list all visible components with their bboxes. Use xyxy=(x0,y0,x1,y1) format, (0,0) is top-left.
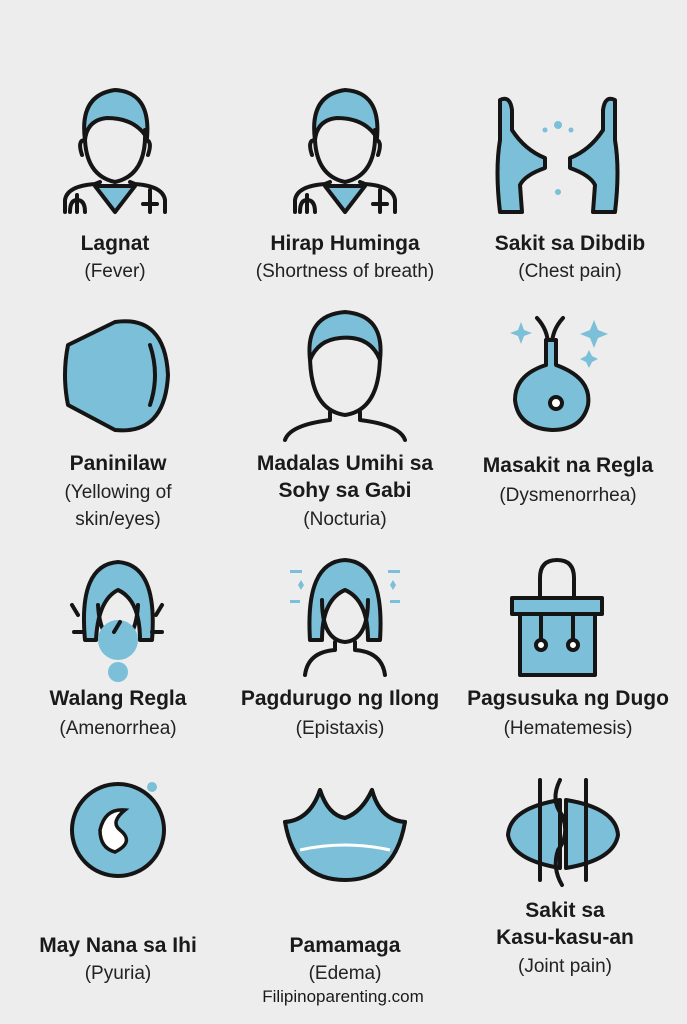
label: Sakit sa Kasu-kasu-an xyxy=(496,899,634,977)
icon: two figures xyxy=(498,99,618,212)
label: Lagnat xyxy=(81,232,149,282)
label: Pagdurugo ng Ilong xyxy=(241,687,439,739)
label: Walang Regla: (Amenorrhea) xyxy=(59,718,177,739)
label: May Nana sa Ihi: May Nana sa Ihi xyxy=(39,934,197,957)
icon: flask xyxy=(510,318,608,430)
label: Paninilaw: (Yellowing of xyxy=(64,482,172,503)
icon: doctor 2 xyxy=(295,90,395,212)
label: Pagsusuka ng Dugo xyxy=(467,687,669,739)
icon: woman xyxy=(290,560,400,675)
label: Hirap Huminga: Hirap Huminga xyxy=(270,232,420,255)
label: Pamamaga: (Edema) xyxy=(309,963,381,984)
label: Pagdurugo ng Ilong: Pagdurugo ng Ilong xyxy=(241,687,439,710)
label: Sakit sa Kasu-kasu-an: Kasu-kasu-an xyxy=(496,926,634,949)
label: Lagnat: (Fever) xyxy=(84,261,146,282)
label: May Nana sa Ihi: (Pyuria) xyxy=(85,963,151,984)
icon: cone/ear xyxy=(65,321,168,430)
icon: joint xyxy=(508,780,618,885)
label: Hirap Huminga: (Shortness of breath) xyxy=(256,261,434,282)
label: Masakit na Regla: (Dysmenorrhea) xyxy=(499,485,637,506)
label: Walang Regla xyxy=(50,687,187,739)
label: Pamamaga: Pamamaga xyxy=(290,934,401,957)
label: Hirap Huminga xyxy=(256,232,434,282)
label: Madalas Umihi: Madalas Umihi sa xyxy=(257,452,433,475)
label: Pagdurugo ng Ilong: (Epistaxis) xyxy=(296,718,384,739)
label: Madalas Umihi xyxy=(257,452,433,530)
label: Pagsusuka ng Dugo: Pagsusuka ng Dugo xyxy=(467,687,669,710)
label: Madalas Umihi: (Nocturia) xyxy=(303,509,387,530)
label: Sakit sa Kasu-kasu-an: (Joint pain) xyxy=(518,956,612,977)
footer: Filipinoparenting.com xyxy=(262,987,424,1006)
icon: doctor 1 xyxy=(65,90,165,212)
label: Masakit na Regla: Masakit na Regla xyxy=(483,454,654,477)
icon: basket xyxy=(512,560,602,675)
label: Pagsusuka ng Dugo: (Hematemesis) xyxy=(504,718,632,739)
icon: circle with swirl xyxy=(72,782,164,876)
icon: water wave bowl xyxy=(285,790,405,880)
label: Masakit na Regla xyxy=(483,454,654,506)
label: Sakit sa Kasu-kasu-an: Sakit sa xyxy=(525,899,605,922)
label: Paninilaw xyxy=(64,452,172,530)
label: Sakit sa Dibdib: Sakit sa Dibdib xyxy=(495,232,645,255)
icon: person xyxy=(285,312,405,440)
label: May Nana sa Ihi xyxy=(39,934,197,984)
label: Sakit sa Dibdib xyxy=(495,232,645,282)
label: Sakit sa Dibdib: (Chest pain) xyxy=(518,261,622,282)
label: Paninilaw: skin/eyes) xyxy=(75,509,161,530)
icon: woman with mask xyxy=(72,562,162,682)
label: Madalas Umihi: Sohy sa Gabi xyxy=(278,479,412,502)
label: Pamamaga xyxy=(290,934,401,984)
label: Paninilaw: Paninilaw xyxy=(70,452,167,475)
label: Walang Regla: Walang Regla xyxy=(50,687,187,710)
label: Lagnat: Lagnat xyxy=(81,232,149,255)
